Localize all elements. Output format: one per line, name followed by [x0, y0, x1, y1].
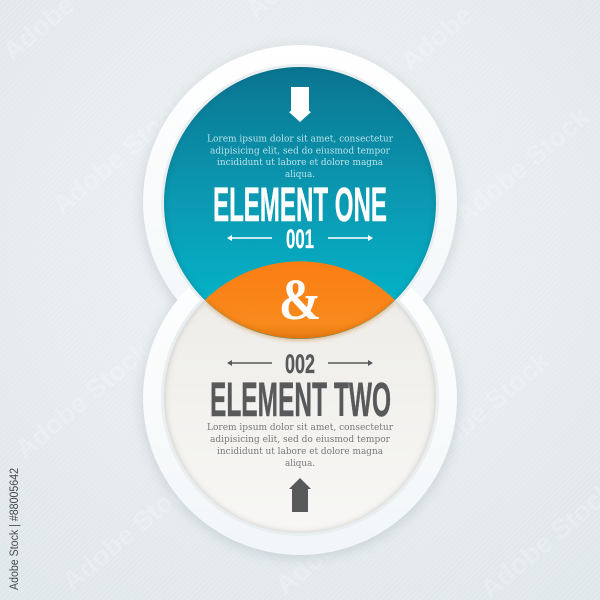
inner frame rims	[161, 64, 439, 536]
stock watermarks: Adobe Stock	[450, 101, 596, 231]
icon: down arrow	[289, 87, 311, 122]
label: 001 with arrows	[227, 224, 373, 254]
icon: ampersand: &	[279, 267, 321, 332]
stock watermarks: Adobe Stock	[270, 471, 416, 600]
stock watermarks: Adobe Stock	[57, 467, 203, 597]
heading: element two: ELEMENT TWO	[210, 374, 391, 427]
body text: element two: aliqua.	[285, 458, 315, 469]
body text: element one: aliqua.	[285, 169, 315, 180]
body text: element two: Lorem ipsum dolor sit amet, consectetur	[207, 422, 393, 433]
figure-eight white frame	[143, 45, 457, 555]
body text: element one: Lorem ipsum dolor sit amet, consectetur	[207, 134, 393, 144]
figure-eight drop shadow	[143, 48, 457, 558]
label: 001 with arrows: 001	[286, 224, 314, 254]
panel: bottom circle	[164, 300, 436, 533]
panel: orange overlap	[205, 261, 395, 339]
icon: up arrow	[289, 478, 311, 512]
body text: element two: incididunt ut labore et dolore magna	[217, 446, 383, 457]
stock watermarks: Adobe Stock	[410, 345, 556, 475]
label: 002 with arrows	[227, 349, 373, 379]
body text: element one: incididunt ut labore et dolore magna	[217, 157, 383, 168]
body text: element two	[207, 422, 393, 469]
stock watermarks: Adobe Stock	[47, 91, 193, 221]
stock watermarks: Adobe Stock	[10, 335, 156, 465]
body text: element one	[207, 134, 393, 180]
panel: top circle	[162, 65, 438, 341]
body text: element two: adipisicing elit, sed do eiusmod tempor	[210, 434, 390, 445]
label: 002 with arrows: 002	[285, 349, 315, 379]
stock watermarks: Adobe	[395, 0, 478, 77]
body text: element one: adipisicing elit, sed do eiusmod tempor	[210, 146, 390, 156]
stock id label: Adobe Stock | #88005642	[9, 468, 21, 590]
heading: element one: ELEMENT ONE	[213, 179, 387, 232]
